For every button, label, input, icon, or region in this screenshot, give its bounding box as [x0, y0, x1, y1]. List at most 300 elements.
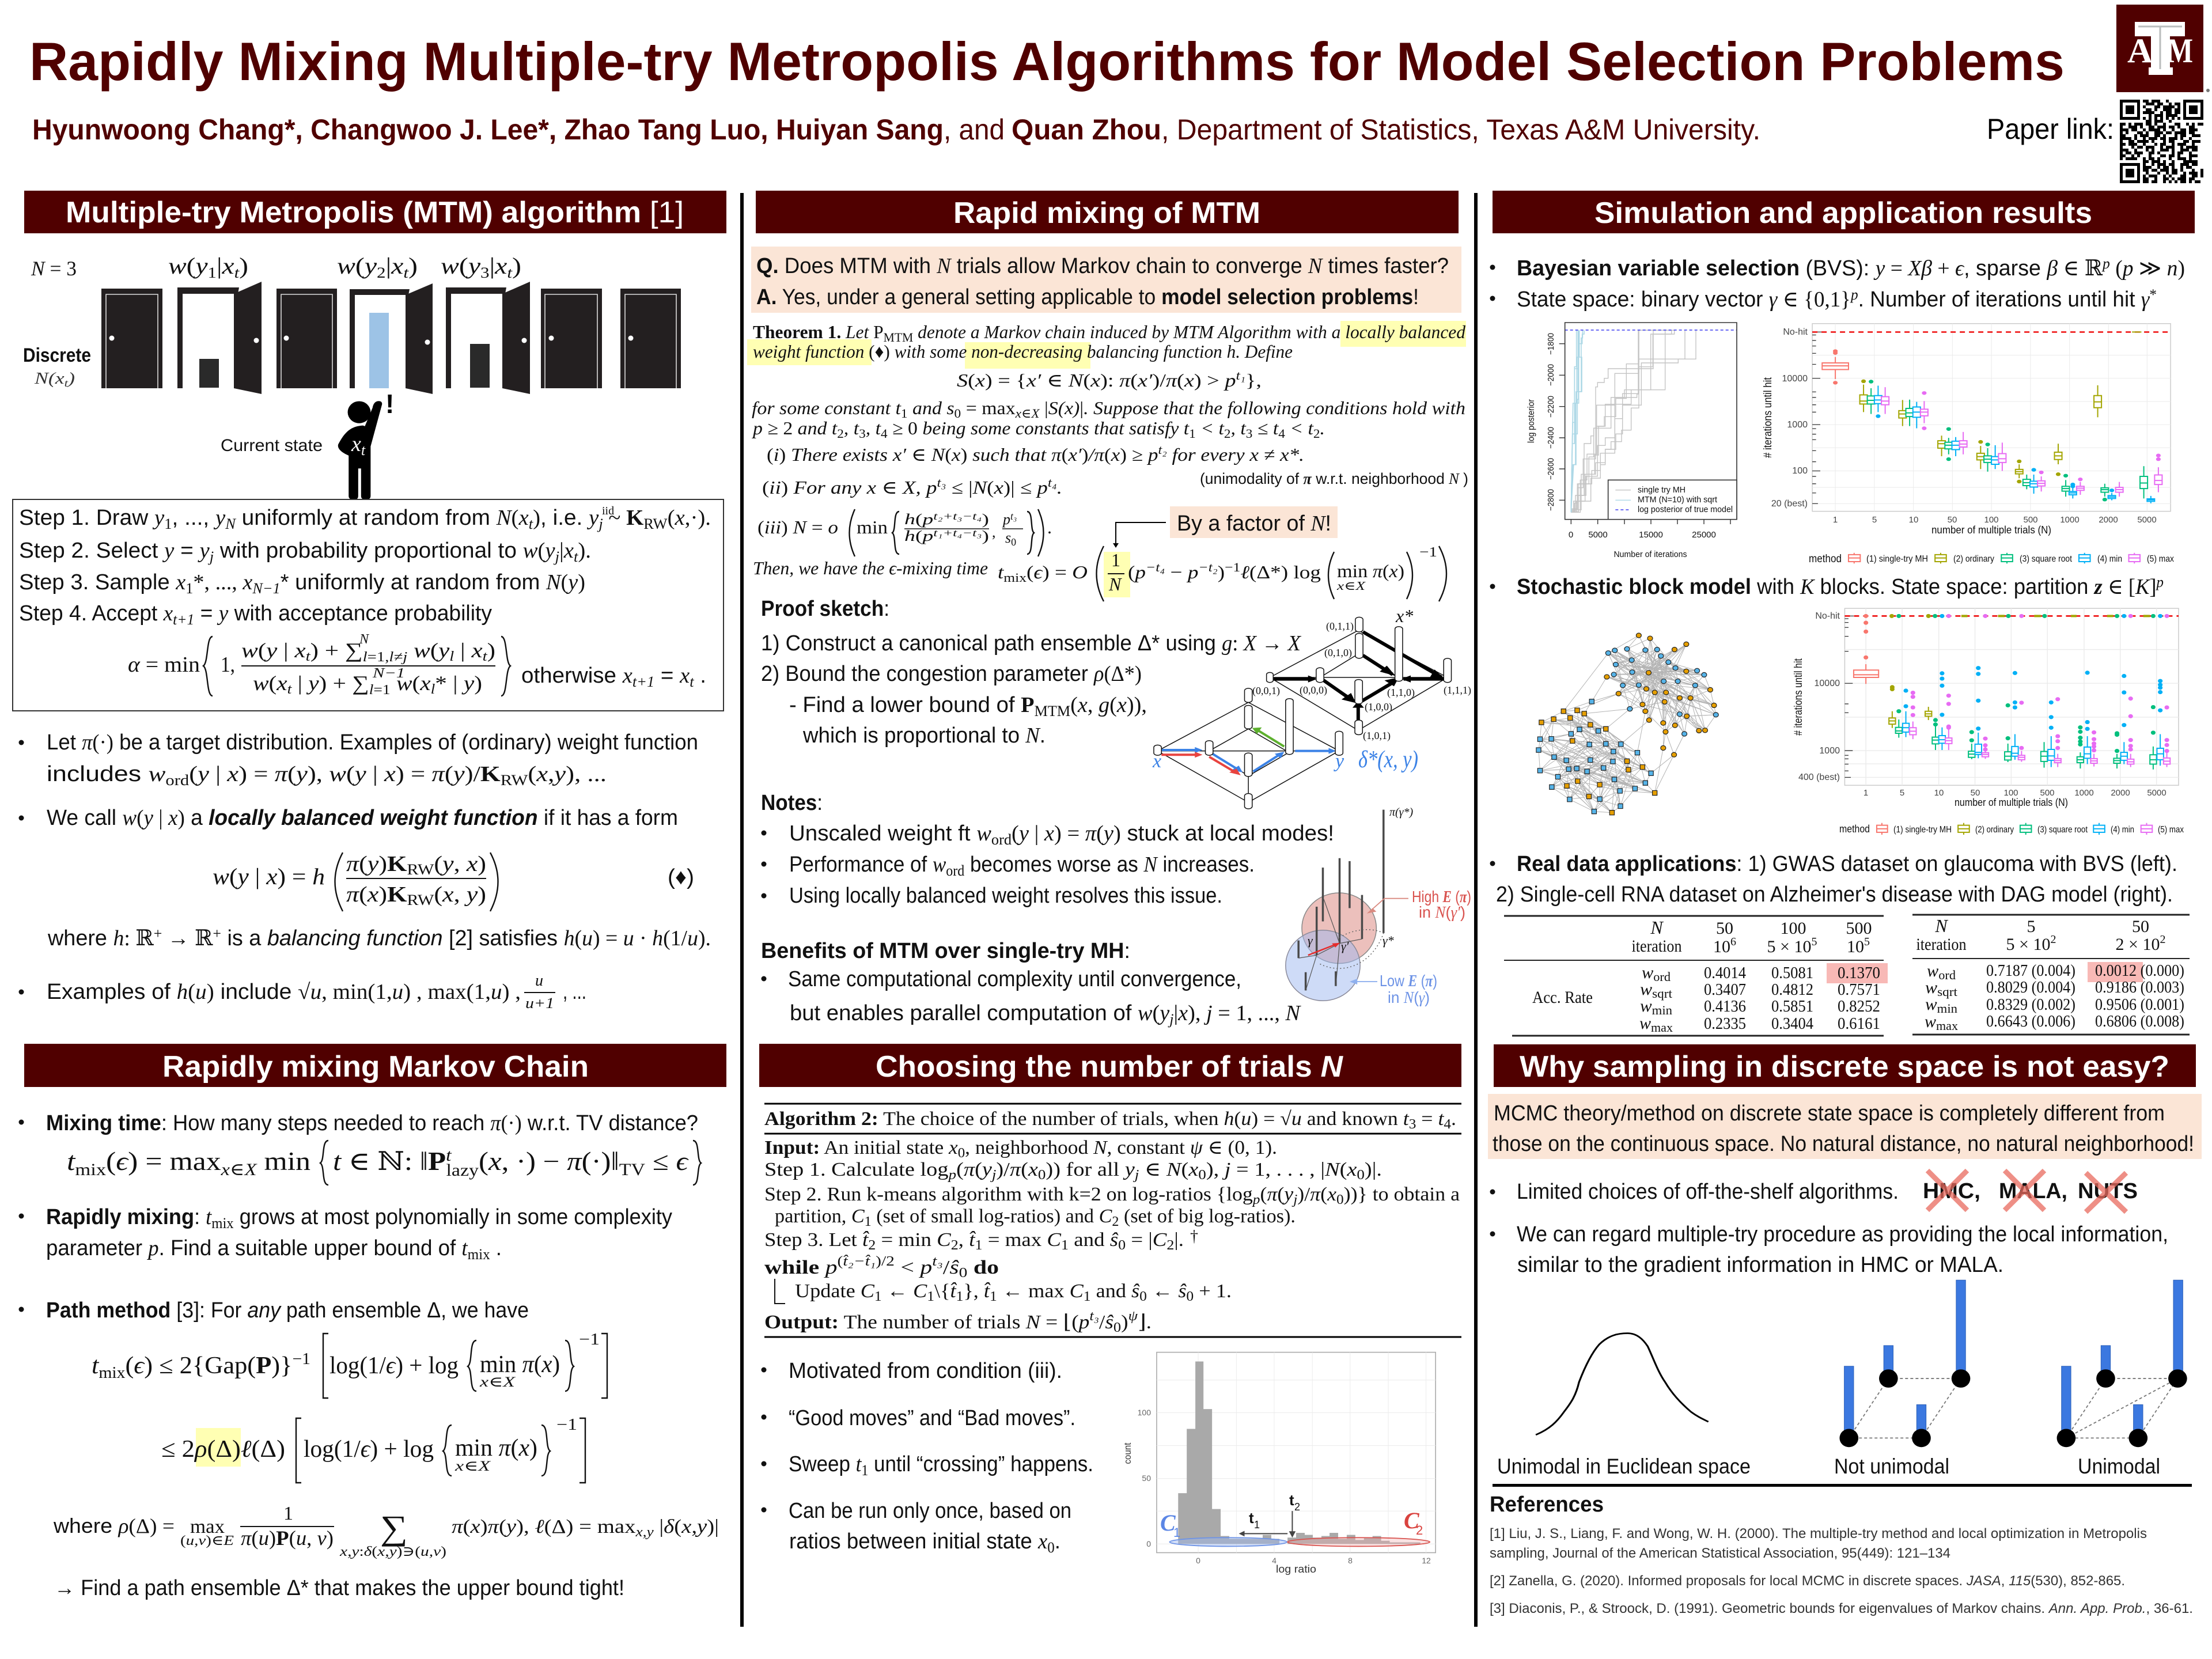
- algorithm 2 box: j = 1, . . . , | N(x: [1225, 1159, 1355, 1180]
- chart: log posterior trace plot: −2000: [1546, 364, 1556, 386]
- weight labels over the doors: [168, 253, 521, 281]
- algorithm 2 box: 2: [1166, 1238, 1174, 1253]
- formula: mixing time definition: t: [67, 1147, 76, 1176]
- table: single-cell RNA acceptance rates: max: [1936, 1018, 1958, 1033]
- step 2: with probability proportional to: [214, 539, 523, 563]
- theorem statement: S(x) = { x′ ∈ N(x): π(x′)/π(x) > p: [957, 370, 1234, 391]
- references: [1490, 1493, 2193, 1616]
- bullets: Bayesian variable selection: State space: binary vector γ ∈ {0,1}: [1517, 287, 1853, 312]
- bullet: rapidly mixing: .: [490, 1236, 502, 1260]
- condition iii formula: [757, 509, 1052, 556]
- condition iii formula: t₂+t₃−t₄: [933, 510, 982, 522]
- table: single-cell RNA acceptance rates: 5: [2027, 917, 2036, 936]
- theorem statement: S(x)|. Suppose that the following conditions hold with: [1048, 397, 1444, 418]
- theorem statement: .: [1057, 477, 1062, 498]
- chart: boxplot of iterations for BVS: # iterations until hit: [1762, 377, 1774, 458]
- theorem statement: (ii) For any x ∈ X, p: [762, 477, 917, 498]
- algorithm 2 box: .: [1451, 1108, 1456, 1130]
- highlight: 1 over N: [1104, 552, 1130, 597]
- weight labels over the doors: w(y: [337, 253, 375, 279]
- text: balancing function definition: +: [154, 925, 162, 942]
- text block: proof sketch: 1) Construct a canonical path ensemble Δ* using g: X → X: [761, 631, 1302, 656]
- table: GWAS acceptance rates: 0.6161: [1838, 1014, 1880, 1033]
- chart: boxplot of iterations for BVS: (5) max: [2147, 554, 2174, 564]
- theorem statement: },: [1245, 370, 1262, 391]
- algorithm 2 box: ŝ: [1131, 1281, 1140, 1302]
- chart: log posterior trace plot: 15000: [1639, 530, 1663, 540]
- acceptance probability formula: .: [694, 664, 706, 688]
- formula: congestion and path length definitions: where ρ(Δ) =: [53, 1514, 175, 1537]
- formula: path method bound line 1: t: [92, 1353, 100, 1379]
- weight labels over the doors: |: [217, 253, 222, 279]
- acceptance probability formula: x: [679, 664, 690, 688]
- step 1: N(x: [497, 506, 528, 530]
- algorithm 2 box: N(x: [1166, 1159, 1197, 1180]
- acceptance probability formula: y) + ∑: [308, 672, 363, 695]
- text block: notes: [761, 791, 1334, 908]
- icon: person pointing at door: t: [361, 442, 366, 459]
- chart: log posterior trace plot: Number of iterations: [1614, 550, 1687, 559]
- algorithm 2 box: p: [947, 1168, 956, 1183]
- bullets: target distribution and weight functions: We call w(y | x) a locally balanced weight function if it has a form: [47, 806, 678, 830]
- theorem statement: MTM: [884, 330, 913, 344]
- theorem statement: , t: [1230, 418, 1247, 438]
- bullets: Bayesian variable selection: *: [2149, 286, 2157, 303]
- text: balancing function definition: where h: ℝ: [48, 926, 154, 950]
- panel: Simulation and application results: [1490, 191, 2195, 1036]
- step 1: K: [626, 506, 644, 530]
- table: GWAS acceptance rates: 0.3407: [1704, 980, 1746, 999]
- acceptance probability formula: =1: [373, 683, 391, 698]
- algorithm 2 box: t: [1438, 1108, 1445, 1130]
- algorithm 2 box: Input: An initial state x: [764, 1137, 957, 1158]
- mixing time result formula: (: [1027, 562, 1033, 582]
- references: [1] Liu, J. S., Liang, F. and Wong, W. H. (2000). The multiple-try method and local optimization in Metropolis: [1490, 1526, 2147, 1541]
- weight labels over the doors: 2: [377, 264, 386, 281]
- algorithm 2 box: π(x: [1310, 1184, 1336, 1205]
- diagram: not unimodal landscape: [1834, 1280, 1970, 1478]
- formula: locally balanced weight function: x, y): [442, 882, 485, 907]
- mixing time result formula: ℓ: [1240, 562, 1250, 582]
- chart: log posterior trace plot: −2800: [1546, 489, 1556, 511]
- algorithm 2 box: )/: [1297, 1184, 1310, 1205]
- bullets: number of trials notes: Sweep t: [789, 1452, 862, 1476]
- condition iii formula: ,: [992, 524, 995, 540]
- diagram: canonical path lattice: (1,1,0): [1387, 687, 1415, 699]
- acceptance probability formula: otherwise x: [521, 664, 632, 688]
- title: Rapidly Mixing Multiple-try Metropolis Algorithms for Model Selection Problems: [29, 31, 2065, 92]
- step 3: N(y): [546, 570, 585, 594]
- diagram: unimodal landscape: [2057, 1280, 2187, 1478]
- formula: locally balanced weight function: y, x): [442, 852, 485, 876]
- algorithm 2 box: 0: [1038, 1168, 1046, 1183]
- acceptance probability formula: =1,: [368, 650, 389, 665]
- acceptance probability formula: ): [487, 639, 495, 662]
- highlight: congestion parameter: [196, 1428, 241, 1467]
- algorithm 2 box: and: [1091, 1281, 1131, 1302]
- diagram: canonical path lattice: y: [1334, 751, 1344, 772]
- formula: path method bound line 1: −1: [292, 1350, 310, 1368]
- diagram: neighborhoods with high and low E(pi): Low E (π): [1380, 972, 1437, 990]
- heading: Rapidly mixing Markov Chain: [24, 1044, 726, 1087]
- chart: boxplot of iterations for SBM: 50: [1971, 788, 1980, 798]
- table: single-cell RNA acceptance rates: w: [1925, 978, 1937, 997]
- acceptance probability formula: l≠j: [389, 650, 408, 665]
- chart: boxplot of iterations for SBM: 500: [2040, 788, 2055, 798]
- acceptance probability formula: t: [690, 673, 694, 690]
- theorem statement: denote a Markov chain induced by MTM Algorithm with a locally balanced: [913, 321, 1466, 342]
- algorithm 2 box: 1: [975, 1238, 982, 1253]
- theorem statement: for some constant t: [752, 397, 892, 418]
- algorithm 2 box: [764, 1104, 1461, 1337]
- algorithm 2 box: /: [1099, 1312, 1105, 1333]
- algorithm 2 box: Update C: [795, 1281, 873, 1302]
- theorem statement: 2: [1313, 426, 1320, 441]
- diagram: stochastic block network: [1536, 633, 1718, 815]
- formula: congestion and path length definitions: max: [190, 1516, 225, 1537]
- table: GWAS acceptance rates: w: [1640, 997, 1652, 1016]
- table: GWAS acceptance rates: 0.5851: [1771, 997, 1813, 1016]
- chart: boxplot of iterations for BVS: 5000: [2137, 515, 2157, 525]
- bullets: target distribution and weight functions: includes w: [47, 762, 163, 786]
- panel: Rapid mixing of MTM: [747, 191, 1471, 1028]
- algorithm 2 box: π(y: [964, 1159, 991, 1180]
- label: Discrete neighborhood: Discrete: [23, 344, 91, 366]
- step 1: ~: [603, 506, 626, 530]
- bullet: examples of h(u): u: [535, 972, 543, 990]
- condition iii formula: s: [1005, 529, 1011, 546]
- algorithm 2 box: t̂₂−t̂₁ )/2: [843, 1254, 891, 1269]
- table: single-cell RNA acceptance rates: min: [1937, 1001, 1957, 1016]
- algorithm 2 box: t₃: [1089, 1309, 1099, 1324]
- algorithm 2 box: j: [990, 1168, 997, 1183]
- formula: mixing time definition: ϵ: [676, 1147, 689, 1176]
- acceptance probability formula: l: [369, 683, 374, 698]
- table: GWAS acceptance rates: 5: [1864, 935, 1870, 948]
- bullet: examples of h(u): [18, 972, 586, 1012]
- icon: Texas A&M logo: M: [2167, 32, 2193, 70]
- formula: mixing time definition: (: [106, 1147, 116, 1176]
- weight labels over the doors: x: [391, 253, 404, 279]
- diagram: neighborhoods with high and low E(pi): π(γ*): [1389, 806, 1414, 819]
- chart: boxplot of iterations for BVS: 50: [1948, 515, 1957, 525]
- heading: Choosing the number of trials: Choosing the number of trials N: [876, 1050, 1343, 1084]
- table: single-cell RNA acceptance rates: 0.8029 (0.004): [1986, 978, 2075, 997]
- algorithm 2 box: t₃: [932, 1254, 943, 1269]
- step 2: x: [563, 539, 574, 563]
- formula: path method bound line 1: min π(x): [480, 1351, 560, 1378]
- diagram: neighborhoods with high and low E(pi): in N(γ′): [1419, 903, 1465, 922]
- diagram: canonical path lattice: (1,0,0): [1365, 701, 1392, 713]
- diagram: neighborhoods with high and low E(pi): γ*: [1382, 933, 1394, 948]
- algorithm 2 box: )|.: [1365, 1159, 1382, 1180]
- step 1: , ...,: [172, 506, 215, 530]
- chart: log posterior trace plot: −1800: [1546, 333, 1556, 355]
- chart: boxplot of iterations for SBM: 2000: [2111, 788, 2130, 798]
- text block: proof sketch: (: [1070, 693, 1078, 717]
- theorem statement: .: [1320, 418, 1325, 438]
- step 4: y with acceptance probability: [219, 601, 497, 626]
- heading: Simulation and application results: Simulation and application results: [1594, 196, 2092, 230]
- algorithm 2 box: ŝ: [1110, 1229, 1119, 1251]
- formula: path method bound line 2: [161, 1416, 585, 1483]
- chart: boxplot of iterations for BVS: 2000: [2099, 515, 2118, 525]
- formula: mixing time definition: mix: [75, 1160, 106, 1179]
- text block: benefits of MTM: Same computational complexity until convergence,: [788, 967, 1241, 991]
- weight labels over the doors: w(y: [168, 253, 206, 279]
- diagram: canonical path lattice: (0,0,0): [1300, 684, 1327, 696]
- acceptance probability formula: 1,: [221, 653, 235, 677]
- icon: person pointing at door: !: [385, 389, 394, 419]
- bullets: target distribution and weight functions: [18, 730, 698, 830]
- chart: log posterior trace plot: log posterior of true model: [1638, 505, 1733, 514]
- table: GWAS acceptance rates: [1504, 916, 1888, 1036]
- bullet: examples of h(u): , ...: [563, 980, 586, 1004]
- algorithm 2 box: ←: [882, 1281, 913, 1302]
- formula: mixing time definition: ≤: [645, 1147, 676, 1176]
- table: single-cell RNA acceptance rates: sqrt: [1937, 984, 1957, 999]
- bullet: limited choices of algorithms: MALA,: [1999, 1179, 2067, 1203]
- algorithm 2 box: p: [1252, 1192, 1260, 1207]
- algorithm 2 box: C: [1070, 1281, 1084, 1302]
- condition iii formula: ): [982, 528, 989, 544]
- bullet: mixing time: Mixing time: How many steps needed to reach π(·) w.r.t. TV distance?: [46, 1111, 698, 1135]
- bullets: target distribution and weight functions: (: [528, 762, 536, 786]
- table: single-cell RNA acceptance rates: 2 × 10: [2116, 935, 2160, 954]
- step 2: j: [208, 548, 214, 565]
- mixing time result formula: −t₄: [1146, 560, 1165, 574]
- acceptance probability formula: =: [654, 664, 680, 688]
- algorithm 2 box: 0: [958, 1146, 965, 1161]
- bullets: target distribution and weight functions: Let π(·) be a target distribution. Examples of (ordinary) weight function: [47, 730, 698, 755]
- condition iii formula: t₃: [1010, 510, 1017, 522]
- text block: notes: Unscaled weight ft w: [789, 821, 991, 846]
- table: GWAS acceptance rates: 0.3404: [1771, 1014, 1813, 1033]
- bullet: rapidly mixing: parameter p. Find a suitable upper bound of t: [46, 1236, 468, 1260]
- bullets: Bayesian variable selection: [1490, 255, 2185, 312]
- bullet: local information: We can regard multiple-try procedure as providing the local information,: [1517, 1222, 2168, 1247]
- table: single-cell RNA acceptance rates: 2: [2160, 933, 2165, 946]
- algorithm 2 box: =: [1416, 1108, 1438, 1130]
- text block: notes: ord: [946, 862, 964, 879]
- acceptance probability formula: w(y | x: [241, 639, 304, 662]
- acceptance probability formula: x: [471, 639, 483, 662]
- acceptance probability formula: t+1: [632, 673, 654, 690]
- text block: notes: y | x) = π(y) stuck at local modes!: [1019, 821, 1331, 846]
- table: single-cell RNA acceptance rates: w: [1925, 1012, 1936, 1031]
- bullets: target distribution and weight functions: x,y), ...: [536, 762, 600, 786]
- algorithm 2 box: /: [943, 1257, 950, 1278]
- acceptance probability formula: * |: [435, 672, 464, 695]
- text block: benefits of MTM: |: [1174, 1001, 1178, 1025]
- step 1: 1: [164, 516, 172, 532]
- table: GWAS acceptance rates: 100: [1780, 919, 1806, 938]
- step 1: ): [533, 506, 540, 530]
- theorem statement: 2: [1224, 426, 1230, 441]
- theorem statement: = max: [961, 397, 1016, 418]
- chart: histogram of log ratios: count: [1122, 1442, 1133, 1464]
- acceptance probability formula: y): [464, 672, 481, 695]
- diagram: canonical path lattice: (0,1,0): [1324, 647, 1352, 659]
- chart: histogram of log ratios: C: [1404, 1508, 1420, 1533]
- chart: histogram of log ratios: t: [1249, 1509, 1254, 1527]
- diagram: neighborhoods with high and low E(pi): in N(γ): [1388, 988, 1430, 1007]
- algorithm 2 box: C: [937, 1229, 951, 1251]
- label: Discrete neighborhood: ): [67, 370, 75, 388]
- theorem statement: < t: [1285, 418, 1314, 438]
- text block: proof sketch: Proof sketch:: [761, 597, 889, 621]
- acceptance probability formula: [128, 632, 706, 698]
- text: balancing function definition: +: [213, 925, 221, 942]
- algorithm 2 box: 0: [1336, 1192, 1344, 1207]
- algorithm 2 box: )) for all: [1046, 1159, 1125, 1180]
- acceptance probability formula: |: [454, 639, 471, 662]
- algorithm 2 box: Step 1. Calculate log: [764, 1159, 927, 1180]
- equation tag: diamond: (♦): [668, 865, 694, 889]
- step 3: 1: [185, 580, 193, 597]
- chart: log posterior trace plot: 5000: [1588, 530, 1608, 540]
- algorithm 2 box: 0: [1113, 1320, 1121, 1335]
- bullet: limited choices of algorithms: Limited choices of off-the-shelf algorithms.: [1517, 1180, 1899, 1204]
- chart: boxplot of iterations for BVS: (2) ordinary: [1953, 554, 1994, 564]
- icon: person pointing at door: x: [351, 432, 361, 456]
- theorem statement: ≤: [946, 477, 968, 498]
- algorithm 2 box: ⌋.: [1138, 1312, 1152, 1333]
- mixing time result formula: x∈X: [1336, 579, 1366, 593]
- condition iii formula: ): [982, 511, 989, 528]
- table: single-cell RNA acceptance rates: ord: [1938, 968, 1956, 982]
- acceptance probability formula: t: [287, 682, 293, 697]
- chart: histogram of log ratios: 12: [1422, 1556, 1431, 1565]
- algorithm 2 box: ,: [959, 1229, 969, 1251]
- chart: histogram of log ratios: 1: [1173, 1525, 1180, 1540]
- chart: histogram of log ratios: [1122, 1353, 1435, 1575]
- algorithm 2 box: j: [1291, 1192, 1298, 1207]
- chart: boxplot of iterations for BVS: [1762, 324, 2174, 565]
- table: single-cell RNA acceptance rates: [1912, 915, 2190, 1035]
- theorem statement: ≥: [888, 418, 908, 438]
- table: GWAS acceptance rates: 5: [1811, 935, 1817, 948]
- diagram: canonical path lattice: (1,0,1): [1363, 730, 1391, 742]
- bullets: target distribution and weight functions: (: [189, 762, 198, 786]
- algorithm 2 box: 2: [951, 1238, 959, 1253]
- table: single-cell RNA acceptance rates: 2: [2050, 933, 2056, 946]
- diagram: canonical path lattice: x*: [1395, 605, 1413, 626]
- paper link label: Paper link:: [1987, 113, 2114, 145]
- step 1: y: [213, 506, 225, 530]
- text block: notes: ord: [991, 831, 1012, 848]
- table: single-cell RNA acceptance rates: 0.8329 (0.002): [1986, 995, 2075, 1014]
- table: GWAS acceptance rates: 0.2335: [1704, 1014, 1746, 1033]
- algorithm 2 box: <: [895, 1257, 920, 1278]
- theorem statement: 4: [1278, 426, 1285, 441]
- diagram: neighborhoods with high and low E(pi): γ′: [1341, 939, 1350, 953]
- condition iii formula: .: [1047, 517, 1052, 537]
- bullet: examples of h(u): u+1: [525, 995, 554, 1012]
- chart: boxplot of iterations for SBM: (4) min: [2111, 825, 2134, 835]
- text block: proof sketch: MTM: [1035, 703, 1070, 719]
- mixing time result formula: (Δ*) log: [1249, 562, 1311, 582]
- algorithm 2 box: = max: [982, 1229, 1047, 1251]
- references: [3] Diaconis, P., & Stroock, D. (1991). Geometric bounds for eigenvalues of Markov chains. Ann. App. Prob., 36-61.: [1490, 1601, 2193, 1616]
- chart: boxplot of iterations for BVS: (1) single-try MH: [1866, 554, 1928, 564]
- table: GWAS acceptance rates: N: [1650, 917, 1664, 938]
- authors and affiliation: , Department of Statistics, Texas A&M University.: [1161, 113, 1760, 146]
- step 1: uniformly at random from: [236, 506, 497, 530]
- formula: mixing time definition: t: [446, 1146, 452, 1165]
- chart: boxplot of iterations for SBM: 10: [1934, 788, 1944, 798]
- diagram: unimodal curve in Euclidean space: [1497, 1334, 1751, 1478]
- formula: path method bound line 2: log(1/ϵ) + log: [304, 1436, 434, 1463]
- table: GWAS acceptance rates: 500: [1846, 919, 1872, 938]
- algorithm 2 box: π(x: [1010, 1159, 1037, 1180]
- formula: path method bound line 1: [92, 1331, 607, 1398]
- algorithm 2 box: Algorithm 2: The choice of the number of trials, when h(u) = √u and known t: [764, 1108, 1408, 1130]
- diagram: canonical path lattice: (0,0,1): [1252, 685, 1280, 697]
- theorem statement: |: [1039, 397, 1048, 418]
- algorithm 2 box: N, constant ψ ∈ (0, 1).: [1093, 1137, 1274, 1158]
- text block: proof sketch: - Find a lower bound of P: [789, 693, 1034, 717]
- bullets: number of trials notes: .: [1055, 1529, 1060, 1554]
- algorithm 2 box: ← max: [997, 1281, 1070, 1302]
- icon: person pointing at door: [338, 389, 394, 499]
- algorithm 2 box: y: [1123, 1159, 1135, 1180]
- diagram: canonical path lattice: x: [1152, 751, 1161, 772]
- chart: histogram of log ratios: 2: [1294, 1501, 1300, 1513]
- formula: locally balanced weight function: RW: [407, 892, 434, 908]
- acceptance probability formula: ) + ∑: [310, 639, 363, 662]
- text block: benefits of MTM: Benefits of MTM over single-try MH:: [761, 939, 1130, 963]
- formula: congestion and path length definitions: π(u)P(u, v): [241, 1527, 334, 1550]
- step 1: RW: [643, 516, 668, 532]
- algorithm 2 box: (set of big log-ratios).: [1119, 1206, 1296, 1227]
- chart: boxplot of iterations for SBM: 100: [2003, 788, 2018, 798]
- algorithm 2 box: },: [963, 1281, 984, 1302]
- chart: log posterior trace plot: MTM (N=10) with sqrt: [1638, 495, 1718, 505]
- table: single-cell RNA acceptance rates: N: [1934, 915, 1948, 936]
- algorithm 2 box: 3: [1409, 1117, 1416, 1132]
- chart: boxplot of iterations for SBM: 400 (best): [1798, 772, 1840, 782]
- mixing time result formula: −1: [1225, 560, 1240, 574]
- step 4: Step 4. Accept x: [19, 601, 173, 626]
- acceptance probability formula: t: [306, 649, 311, 664]
- table: GWAS acceptance rates: Acc. Rate: [1532, 988, 1593, 1007]
- bullets: Bayesian variable selection: Bayesian variable selection (BVS): y = Xβ + ϵ, sparse β ∈ ℝ: [1517, 256, 2103, 281]
- chart: histogram of log ratios: 1: [1254, 1519, 1260, 1531]
- condition iii formula: t₁+t₄−t₃: [933, 527, 982, 539]
- label: N equals 3: N = 3: [31, 257, 77, 280]
- bullet: rapidly mixing: [18, 1205, 672, 1263]
- weight labels over the doors: t: [403, 264, 409, 281]
- acceptance probability formula: t: [483, 649, 488, 664]
- chart: boxplot of iterations for SBM: 1: [1863, 788, 1868, 798]
- chart: boxplot of iterations for BVS: 100: [1984, 515, 1999, 525]
- bullet: rapidly mixing: Rapidly mixing: t: [46, 1205, 212, 1229]
- table: single-cell RNA acceptance rates: 0.6806 (0.008): [2095, 1012, 2184, 1031]
- step 3: Step 3. Sample x: [19, 570, 185, 594]
- formula: mixing time definition: lazy: [446, 1161, 479, 1180]
- step 4: t+1: [173, 611, 194, 628]
- step 1: Step 1. Draw y: [19, 506, 164, 530]
- bullet: stochastic block model: Stochastic block model with K blocks. State space: partition z ∈ [K]: [1517, 575, 2157, 599]
- icon: row of doors: [101, 282, 681, 394]
- algorithm 2 box: ←: [1147, 1281, 1178, 1302]
- formula: path method bound line 1: ϵ) ≤ 2{Gap( P)}: [134, 1353, 291, 1379]
- bullet: real data applications: [1490, 852, 2177, 907]
- formula: locally balanced weight function: π(y)K: [346, 852, 404, 876]
- mixing time result formula: t: [998, 562, 1005, 582]
- panel: Rapidly mixing Markov Chain: [18, 1044, 726, 1600]
